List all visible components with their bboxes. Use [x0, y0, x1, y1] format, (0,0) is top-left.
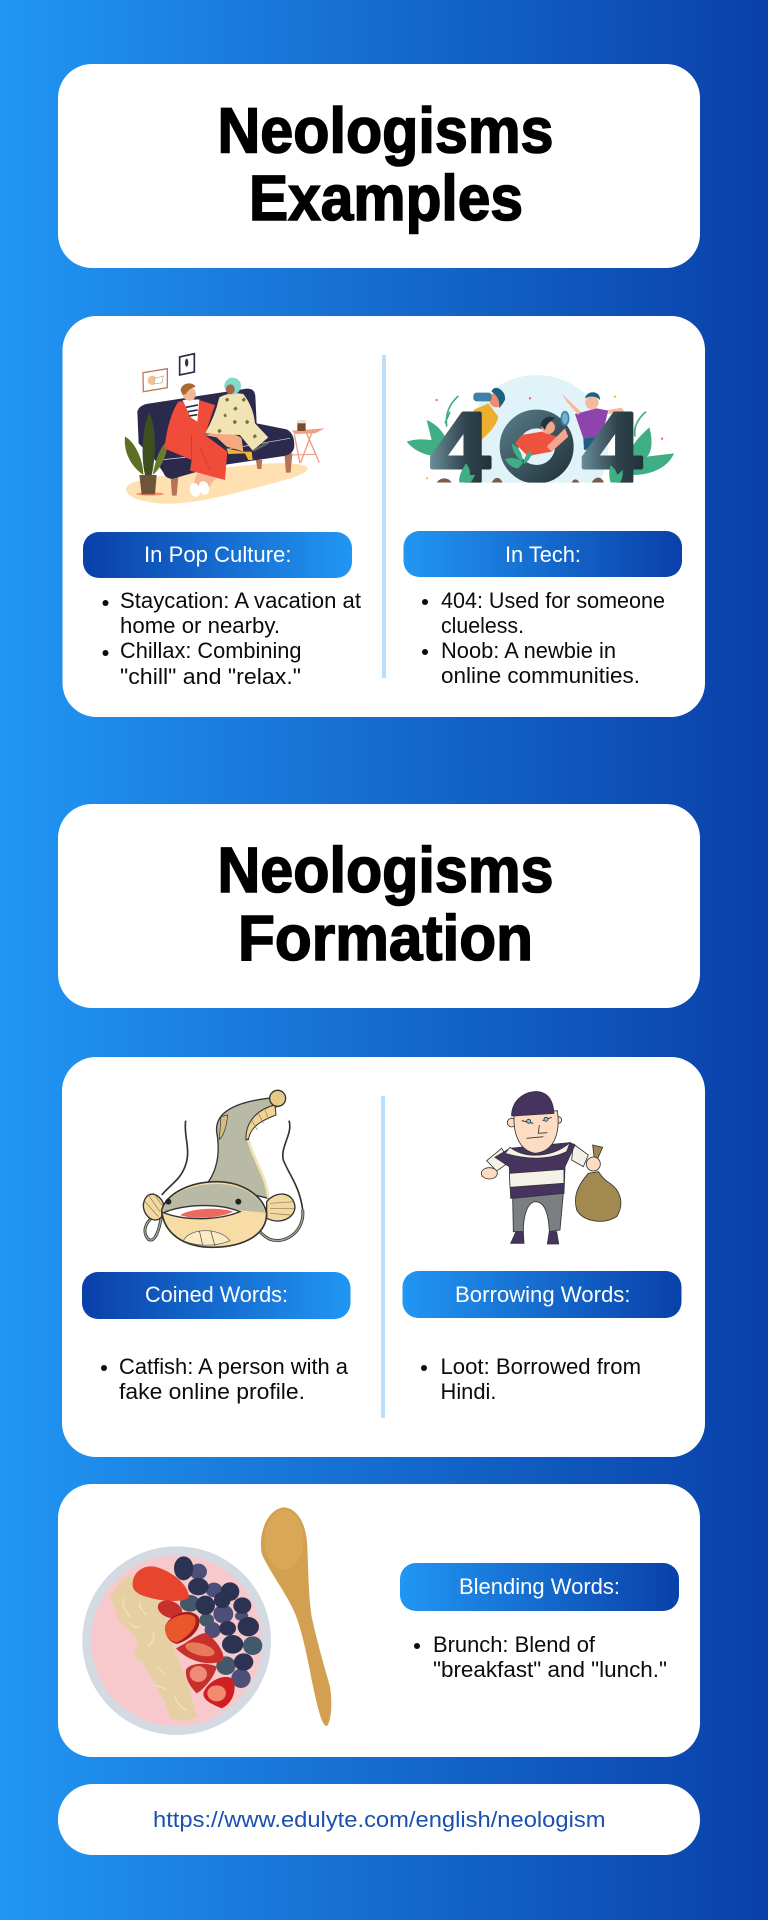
illustration: red person with magnifier — [505, 412, 569, 468]
illustration: catfish — [143, 1090, 303, 1247]
illustration: brunch bowl and spoon — [82, 1507, 331, 1735]
list: tech examples — [422, 588, 665, 688]
title card: Neologisms Formation — [58, 804, 700, 1008]
heading: Neologisms Examples: Examples — [249, 162, 523, 234]
illustration: 404 characters: 4 — [582, 392, 642, 502]
list: coined words: Catfish: A person with a — [119, 1354, 349, 1379]
list: blending words: "breakfast" and "lunch." — [433, 1657, 667, 1682]
heading: Neologisms Formation — [218, 834, 554, 974]
list: pop culture examples: "chill" and "relax." — [120, 664, 301, 689]
list: tech examples: clueless. — [441, 613, 524, 638]
subheading pill: Blending Words — [400, 1563, 679, 1611]
heading: Neologisms Examples — [218, 94, 554, 234]
subheading pill: Borrowing Words: Borrowing Words: — [455, 1282, 630, 1307]
subheading pill: Borrowing Words — [402, 1271, 682, 1318]
list: blending words — [414, 1632, 667, 1682]
list: blending words: Brunch: Blend of — [433, 1632, 596, 1657]
illustration: thief with sack — [481, 1092, 621, 1244]
subheading pill: In Pop Culture — [83, 532, 352, 578]
list: borrowing words: Hindi. — [440, 1379, 496, 1404]
subheading pill: In Tech — [404, 531, 682, 577]
divider — [382, 355, 386, 678]
list: pop culture examples: home or nearby. — [120, 613, 280, 638]
list: borrowing words — [421, 1354, 641, 1404]
subheading pill: Blending Words: Blending Words: — [459, 1574, 620, 1599]
list: pop culture examples: Chillax: Combining — [120, 638, 302, 663]
subheading pill: In Tech: In Tech: — [505, 542, 581, 567]
heading: Neologisms Examples: Neologisms — [218, 94, 554, 166]
panel: blending words — [58, 1484, 700, 1757]
illustration: yellow person with binoculars — [473, 388, 505, 440]
panel: formation — [62, 1057, 705, 1457]
heading: Neologisms Formation: Formation — [238, 902, 533, 974]
subheading pill: Coined Words — [82, 1272, 350, 1319]
illustration: 404 characters — [406, 375, 674, 483]
subheading pill: In Pop Culture: In Pop Culture: — [144, 542, 292, 567]
list: coined words: fake online profile. — [119, 1379, 305, 1404]
panel: examples — [62, 316, 705, 717]
list: coined words — [101, 1354, 349, 1404]
divider — [381, 1096, 385, 1418]
list: tech examples: online communities. — [441, 663, 640, 688]
list: borrowing words: Loot: Borrowed from — [440, 1354, 641, 1379]
illustration: zero ring of 404 — [509, 419, 564, 474]
list: tech examples: Noob: A newbie in — [441, 638, 616, 663]
title card: Neologisms Examples — [58, 64, 700, 268]
illustration: purple person waving — [562, 392, 624, 450]
subheading pill: Coined Words: Coined Words: — [145, 1282, 288, 1307]
list: pop culture examples: Staycation: A vacation at — [120, 588, 361, 613]
list: tech examples: 404: Used for someone — [441, 588, 665, 613]
illustration: 404 characters: 4 — [431, 392, 490, 502]
source link card — [58, 1784, 700, 1855]
list: pop culture examples — [102, 588, 361, 689]
heading: Neologisms Formation: Neologisms — [218, 834, 554, 906]
source link card: https://www.edulyte.com/english/neologism — [153, 1807, 606, 1832]
illustration: couple on sofa — [125, 354, 325, 504]
